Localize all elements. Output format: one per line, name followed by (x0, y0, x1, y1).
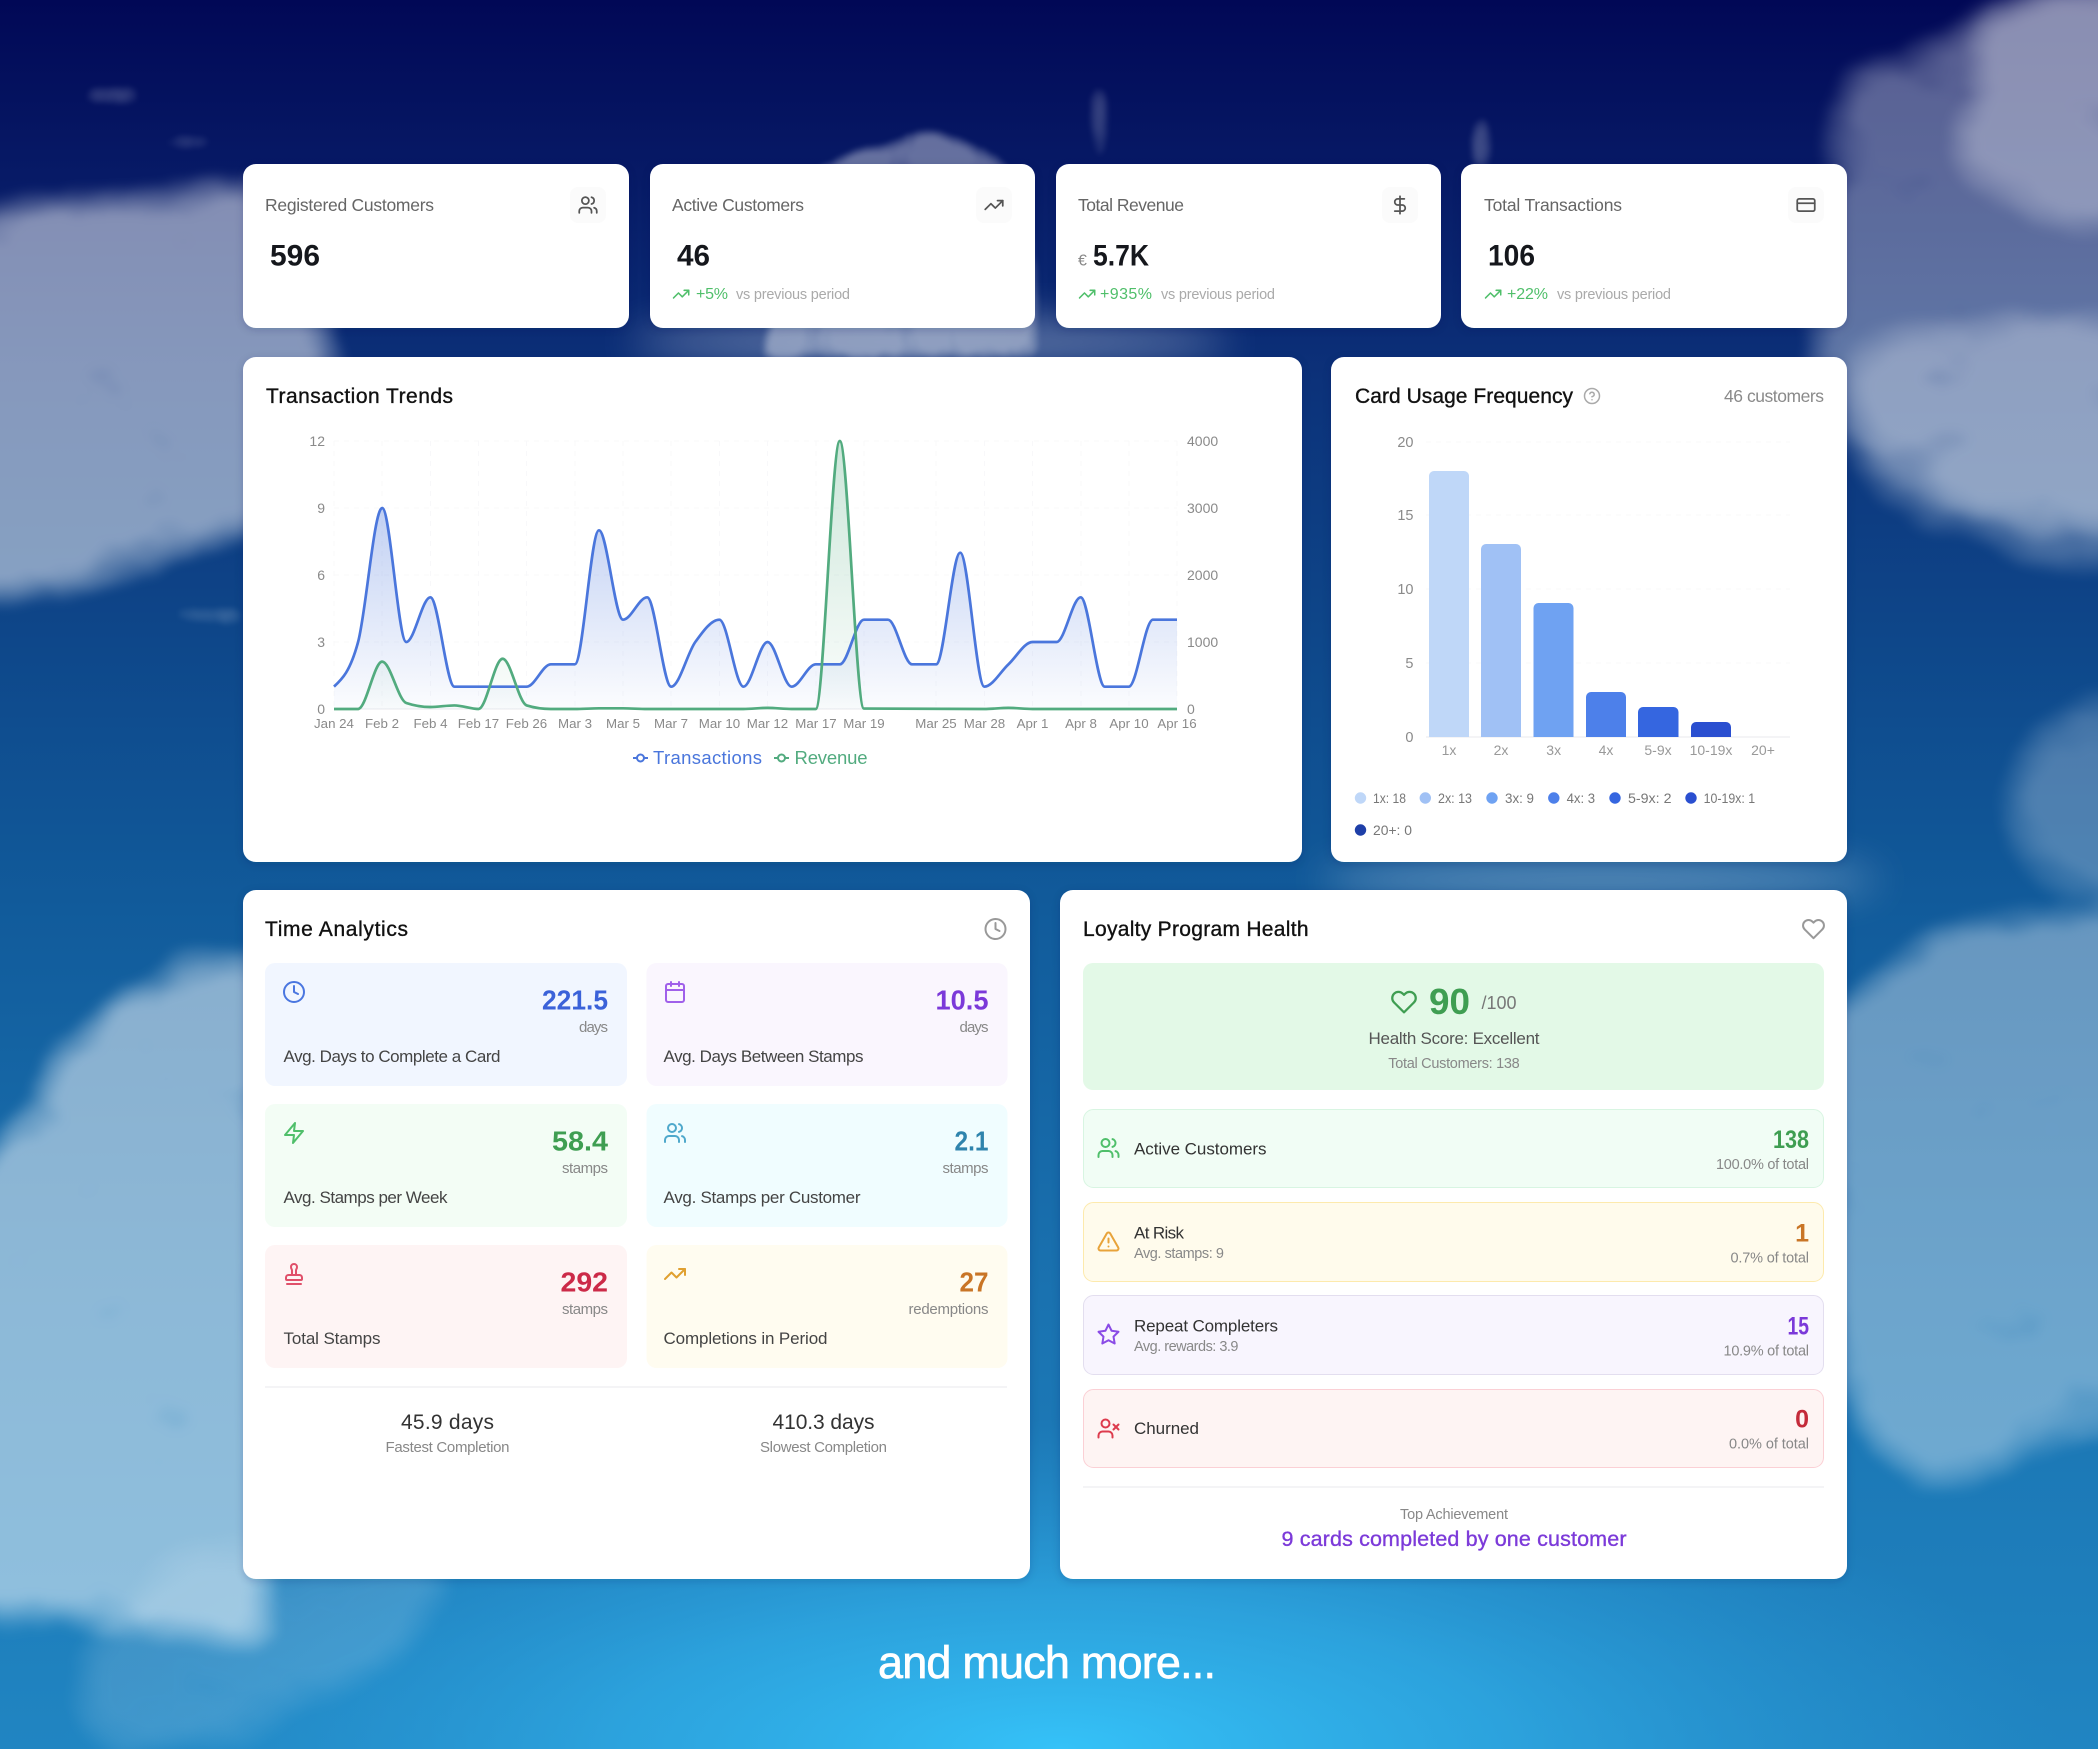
tile: total stamps: Total Stamps (284, 1329, 380, 1348)
delta (1486, 286, 1671, 303)
KPI card: Registered Customers (243, 164, 629, 328)
value: 5.7K (1093, 240, 1149, 272)
panel: Time Analytics (243, 890, 1030, 1579)
icon: trend (976, 187, 1012, 223)
left axis labels: 3 (317, 634, 325, 650)
tile: avg days to complete: days (579, 1019, 608, 1036)
bar chart: 2x (1494, 742, 1508, 758)
legend (1355, 790, 1755, 838)
x axis labels: Mar 12 (747, 716, 788, 731)
delta: +935% (1100, 286, 1152, 303)
tile: completions in period: Completions in Period (664, 1329, 828, 1348)
icon: heart (1803, 920, 1824, 938)
tile: avg stamps per customer: 2.1 (954, 1126, 988, 1156)
x axis labels: Jan 24 (314, 716, 354, 731)
KPI card: Total Revenue (1056, 164, 1441, 328)
legend: Transactions (653, 747, 762, 768)
x axis labels: Apr 8 (1065, 716, 1097, 731)
top achievement (1282, 1507, 1626, 1551)
row: churned (1084, 1390, 1824, 1468)
right axis labels: 3000 (1187, 500, 1218, 516)
customer count: 46 customers (1724, 386, 1824, 406)
tile: avg days between stamps (646, 963, 1008, 1086)
delta: +22% (1507, 286, 1548, 303)
bar chart: 15 (1397, 508, 1414, 524)
icon: users (570, 187, 606, 223)
delta (1080, 286, 1275, 303)
KPI card: Total Transactions (1461, 164, 1847, 328)
x axis labels: Mar 25 (915, 716, 957, 731)
health score box: 90 (1429, 981, 1470, 1022)
bar chart: 10-19x (1690, 742, 1732, 758)
row: active customers: 138 (1773, 1126, 1809, 1154)
icon: credit card (1788, 187, 1824, 223)
bar chart: 4x (1599, 742, 1613, 758)
bar chart: 10 (1397, 582, 1414, 598)
row: active customers (1084, 1110, 1824, 1188)
tile: completions in period (646, 1245, 1008, 1368)
x axis labels: Mar 3 (558, 716, 592, 731)
x axis labels: Mar 7 (654, 716, 688, 731)
bar chart: 1x (1442, 742, 1456, 758)
tile: completions in period: redemptions (908, 1301, 988, 1318)
row: repeat completers: Repeat Completers (1134, 1316, 1278, 1336)
left axis labels: 12 (309, 433, 325, 449)
tile: avg stamps per customer (646, 1104, 1008, 1227)
legend: 1x: 18 (1373, 790, 1406, 806)
value: € (1078, 252, 1087, 270)
stat: slowest completion (760, 1411, 887, 1456)
label: Active Customers (672, 195, 804, 215)
bar chart: 5-9x (1644, 742, 1672, 758)
bar chart (1397, 435, 1790, 758)
tile: total stamps: 292 (560, 1266, 608, 1298)
bar chart: 0 (1405, 730, 1414, 746)
delta: vs previous period (736, 287, 850, 303)
health score box: Total Customers: 138 (1388, 1056, 1520, 1072)
x axis labels: Feb 17 (458, 716, 499, 731)
x axis labels (314, 716, 1197, 731)
tile: avg stamps per week (265, 1104, 627, 1227)
left axis labels: 9 (317, 500, 325, 516)
health score box (1083, 963, 1824, 1090)
label: Total Transactions (1484, 195, 1622, 215)
row: active customers: Active Customers (1134, 1140, 1266, 1158)
legend: 3x: 9 (1505, 790, 1534, 806)
x axis labels: Apr 10 (1109, 716, 1149, 731)
row: repeat completers (1084, 1296, 1824, 1374)
tile: avg days to complete: Avg. Days to Complete a Card (284, 1047, 500, 1066)
x axis labels: Feb 4 (413, 716, 448, 731)
tile: avg days to complete (265, 963, 627, 1086)
row: repeat completers: Avg. rewards: 3.9 (1134, 1339, 1238, 1355)
right axis labels: 1000 (1187, 634, 1218, 650)
right axis labels (1187, 433, 1218, 717)
bar chart: 5 (1405, 656, 1414, 672)
stat: slowest completion: Slowest Completion (760, 1439, 887, 1456)
x axis labels: Feb 2 (365, 716, 399, 731)
legend: 10-19x: 1 (1704, 790, 1755, 806)
health score box: /100 (1482, 993, 1516, 1013)
heading: Loyalty Program Health (1083, 918, 1308, 941)
delta: vs previous period (1161, 287, 1275, 303)
right axis labels: 2000 (1187, 567, 1218, 583)
row: at risk: Avg. stamps: 9 (1134, 1246, 1224, 1262)
row: repeat completers: 15 (1788, 1312, 1809, 1340)
heading: Time Analytics (265, 918, 408, 941)
row: churned: 0 (1795, 1406, 1809, 1434)
x axis labels: Apr 16 (1157, 716, 1197, 731)
panel: Transaction Trends (243, 357, 1302, 862)
delta (674, 286, 850, 303)
bar chart: 20+ (1751, 742, 1775, 758)
legend: 2x: 13 (1438, 790, 1472, 806)
value: 106 (1488, 240, 1535, 272)
x axis labels: Mar 17 (795, 716, 837, 731)
tile: avg stamps per customer: stamps (942, 1160, 988, 1177)
tile: total stamps: stamps (562, 1301, 608, 1318)
row: churned: 0.0% of total (1729, 1436, 1809, 1452)
x axis labels: Apr 1 (1017, 716, 1048, 731)
tile: avg days to complete: 221.5 (542, 984, 608, 1016)
legend: Revenue (794, 747, 868, 768)
legend: 5-9x: 2 (1628, 790, 1672, 806)
tile: avg days between stamps: 10.5 (936, 984, 988, 1016)
stat: fastest completion: 45.9 days (401, 1411, 494, 1434)
tile: completions in period: 27 (960, 1266, 988, 1298)
footer tagline: and much more... (878, 1637, 1216, 1688)
x axis labels: Feb 26 (506, 716, 547, 731)
stat: slowest completion: 410.3 days (772, 1411, 874, 1434)
row: at risk: At Risk (1134, 1224, 1184, 1242)
label: Total Revenue (1078, 195, 1184, 215)
legend (633, 747, 868, 768)
tile: avg stamps per week: Avg. Stamps per Week (284, 1188, 448, 1207)
left axis labels: 6 (317, 567, 325, 583)
right axis labels: 0 (1187, 701, 1195, 717)
x axis labels: Mar 5 (606, 716, 640, 731)
row: at risk (1084, 1202, 1824, 1282)
right axis labels: 4000 (1187, 433, 1218, 449)
left axis labels (309, 433, 325, 717)
health score box: Health Score: Excellent (1368, 1029, 1540, 1048)
tile: avg stamps per week: stamps (562, 1160, 608, 1177)
KPI card: Active Customers (650, 164, 1035, 328)
tile: total stamps (265, 1245, 627, 1368)
delta: vs previous period (1557, 287, 1671, 303)
x axis labels: Mar 10 (699, 716, 740, 731)
value: 46 (677, 240, 710, 272)
row: repeat completers: 10.9% of total (1724, 1344, 1809, 1360)
heading: Transaction Trends (266, 385, 453, 408)
tile: avg days between stamps: days (960, 1019, 988, 1036)
bar chart: 3x (1546, 742, 1561, 758)
icon: dollar (1382, 187, 1418, 223)
row: at risk: 1 (1795, 1220, 1809, 1248)
x axis labels: Mar 28 (964, 716, 1005, 731)
line chart (309, 433, 1218, 731)
left axis labels: 0 (317, 701, 325, 717)
panel: Loyalty Program Health (1060, 890, 1847, 1579)
x axis labels: Mar 19 (843, 716, 885, 731)
row: churned: Churned (1134, 1419, 1199, 1438)
value: 596 (270, 240, 320, 272)
icon: clock (986, 919, 1006, 939)
stat: fastest completion: Fastest Completion (386, 1439, 510, 1456)
row: active customers: 100.0% of total (1716, 1157, 1809, 1173)
label: Registered Customers (265, 195, 434, 215)
tile: avg stamps per customer: Avg. Stamps per Customer (664, 1188, 861, 1207)
top achievement: 9 cards completed by one customer (1282, 1527, 1626, 1551)
tile: avg days between stamps: Avg. Days Between Stamps (664, 1047, 864, 1066)
tile: avg stamps per week: 58.4 (552, 1126, 608, 1156)
top achievement: Top Achievement (1400, 1507, 1508, 1523)
legend: 4x: 3 (1567, 790, 1595, 806)
legend: 20+: 0 (1373, 822, 1412, 838)
delta: +5% (696, 286, 728, 303)
bar chart: 20 (1397, 435, 1414, 451)
icon: help (1584, 388, 1600, 404)
row: at risk: 0.7% of total (1730, 1250, 1809, 1266)
stat: fastest completion (386, 1411, 510, 1456)
heading: Card Usage Frequency (1355, 385, 1574, 408)
panel: Card Usage Frequency (1331, 357, 1847, 862)
